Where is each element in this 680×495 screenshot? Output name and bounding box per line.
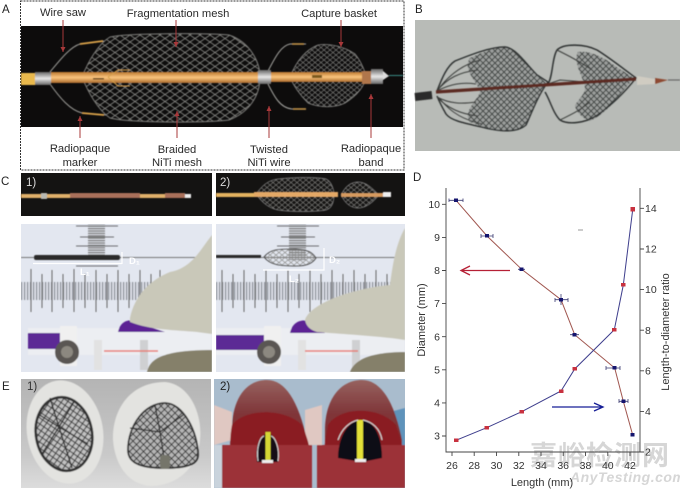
label: fragmentation mesh: Fragmentation mesh [127, 8, 229, 20]
photo C1 bottom: ruler and handle: D₁ [129, 256, 140, 267]
panel B: device photograph on grey [415, 4, 680, 151]
axis title: length: Length (mm) [511, 477, 573, 489]
photo E2: tissue models: 2) [220, 381, 230, 393]
label: radiopaque marker: Radiopaque [50, 143, 110, 155]
x axis labels: 40 [602, 460, 614, 472]
x axis labels: 34 [535, 460, 547, 472]
left axis labels: 7 [434, 298, 440, 310]
photo C1 top: collapsed device: 1) [26, 177, 36, 189]
panel letter C: C [1, 176, 9, 188]
x axis labels: 32 [513, 460, 525, 472]
panel A: device diagram [2, 1, 404, 170]
left axis labels: 4 [434, 398, 440, 410]
photo C1 bottom: ruler and handle [21, 224, 212, 372]
right axis labels: 12 [645, 244, 657, 256]
photo C2 bottom: ruler and handle [216, 224, 405, 372]
photo E2: tissue models [214, 379, 405, 488]
dashed frame [20, 1, 404, 170]
right axis labels [645, 203, 657, 458]
panel D: line chart [413, 172, 680, 489]
arrow: blue pointing right [552, 403, 603, 411]
label: wire saw: Wire saw [40, 7, 87, 19]
watermark: 嘉峪检测网 [530, 441, 670, 471]
label: twisted NiTi wire: Twisted [250, 144, 288, 156]
panel letter A: A [2, 4, 10, 16]
photo C2 bottom: ruler and handle: D₂ [329, 255, 340, 266]
panel E [2, 374, 405, 490]
photo C2 top: expanded device [216, 173, 405, 216]
x axis labels [446, 460, 636, 472]
axis title: diameter: Diameter (mm) [416, 283, 428, 357]
grey photo with device [415, 20, 680, 151]
right axis labels: 14 [645, 203, 657, 215]
watermark [530, 441, 680, 485]
x axis labels: 36 [557, 460, 569, 472]
right axis labels: 8 [645, 325, 651, 337]
x axis labels: 42 [624, 460, 636, 472]
photo E1: mesh in rings: 1) [27, 381, 37, 393]
right axis labels: 10 [645, 284, 657, 296]
left axis labels: 5 [434, 364, 440, 376]
x axis labels: 30 [491, 460, 502, 472]
left axis labels: 9 [434, 232, 440, 244]
left axis labels: 8 [434, 265, 440, 277]
photo C1 top: collapsed device [21, 173, 212, 216]
arrow: red pointing left [461, 266, 510, 275]
left axis labels: 10 [428, 199, 440, 211]
callout arrows [63, 20, 371, 138]
label: braided NiTi mesh: NiTi mesh [152, 157, 202, 169]
right axis labels: 4 [645, 406, 651, 418]
photo C2 top: expanded device: 2) [220, 177, 230, 189]
photo C1 bottom: ruler and handle: L₁ [80, 267, 90, 278]
label: braided NiTi mesh: Braided [158, 144, 196, 156]
panel C: deployment comparison [1, 173, 405, 372]
label: radiopaque band: Radiopaque [341, 143, 401, 155]
photo C2 bottom: ruler and handle: L₂ [289, 274, 299, 285]
series: length-to-diameter ratio [454, 207, 635, 442]
x axis labels: 38 [580, 460, 591, 472]
series: diameter [449, 198, 634, 436]
left axis labels [428, 199, 440, 442]
panel letter E: E [2, 381, 10, 393]
panel letter D: D [413, 172, 421, 184]
stray mark [578, 230, 583, 231]
right axis labels: 2 [645, 446, 651, 458]
axis title: length-to-diameter ratio: Length-to-diameter ratio [660, 273, 672, 391]
device photograph [21, 26, 403, 127]
arrows and labels [40, 7, 401, 169]
label: radiopaque marker: marker [63, 157, 98, 169]
x axis labels: 28 [468, 460, 480, 472]
left axis labels: 6 [434, 332, 440, 344]
label: radiopaque band: band [359, 157, 383, 169]
label: twisted NiTi wire: NiTi wire [247, 157, 291, 169]
x axis labels: 26 [446, 460, 458, 472]
chart axes and ticks [442, 188, 644, 456]
right axis labels: 6 [645, 366, 651, 378]
panel letter B: B [415, 4, 423, 16]
label: capture basket: Capture basket [301, 8, 378, 20]
left axis labels: 3 [434, 430, 440, 442]
photo E1: mesh in rings [19, 374, 211, 490]
